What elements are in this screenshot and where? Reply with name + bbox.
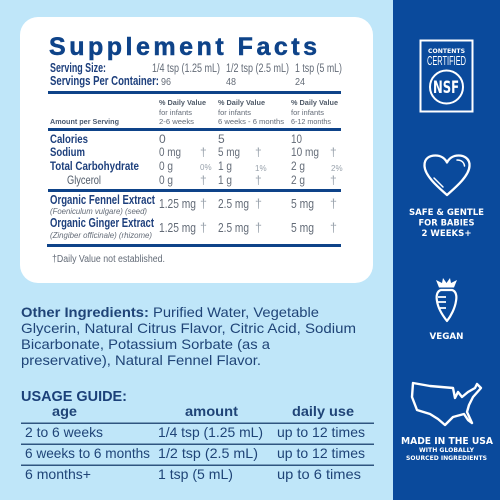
nutrient rows: 1% — [255, 164, 267, 173]
column headers: for infants — [291, 108, 324, 117]
nutrient rows: Calories — [50, 132, 88, 146]
column headers: 6 weeks - 6 months — [218, 117, 284, 126]
usage table headers: daily use — [292, 403, 354, 419]
usage row: 6 weeks to 6 months: up to 12 times — [277, 445, 365, 461]
nutrient rows: † — [330, 145, 337, 159]
icon: NSF certified badge: NSF — [433, 78, 459, 98]
organic extract rows: (Foeniculum vulgare) (seed) — [50, 206, 147, 216]
nutrient rows: 1 g — [218, 159, 232, 173]
nutrient rows: Glycerol — [67, 173, 101, 187]
organic extract rows: Organic Ginger Extract — [50, 216, 155, 230]
nutrient rows: 2 g — [291, 173, 305, 187]
title: Supplement Facts — [49, 33, 317, 61]
benefit label: made in the USA: WITH GLOBALLY — [419, 447, 475, 454]
nutrient rows: 0 — [159, 132, 166, 146]
icon: USA map outline — [412, 383, 481, 425]
column headers: for infants — [218, 108, 251, 117]
usage guide — [21, 389, 374, 482]
organic extract rows: † — [200, 221, 207, 235]
organic extract rows: † — [255, 221, 262, 235]
usage guide heading: USAGE GUIDE: — [21, 389, 127, 405]
usage row: 6 weeks to 6 months: 1/2 tsp (2.5 mL) — [158, 445, 258, 461]
nutrient rows: 10 mg — [291, 145, 319, 159]
nutrient rows: 0 g — [159, 159, 173, 173]
organic extract rows: 5 mg — [291, 220, 314, 235]
column headers: % Daily Value — [218, 98, 265, 107]
nutrient rows: † — [255, 173, 262, 187]
benefit label: made in the USA: SOURCED INGREDIENTS — [406, 455, 487, 462]
nutrient rows: 2% — [331, 164, 343, 173]
usage row: 6 months+: up to 6 times — [277, 466, 361, 482]
usage row: 6 months+: 6 months+ — [25, 466, 91, 482]
serving information: 1/4 tsp (1.25 mL) — [152, 63, 220, 75]
nutrient rows: 0 mg — [159, 145, 181, 159]
icon: NSF certified badge: CONTENTS — [428, 47, 465, 55]
serving information: 48 — [226, 77, 236, 88]
nutrient rows: Total Carbohydrate — [50, 159, 139, 173]
icon: NSF certified badge — [420, 40, 472, 112]
usage row: 2 to 6 weeks: up to 12 times — [277, 424, 365, 440]
usage row: 2 to 6 weeks — [25, 424, 365, 440]
nutrient rows: † — [200, 173, 207, 187]
organic extract rows: Organic Fennel Extract — [50, 193, 156, 207]
organic extract rows: 1.25 mg — [159, 220, 196, 235]
icon: NSF certified badge: CERTIFIED — [427, 53, 466, 68]
benefit label: made in the USA: MADE IN THE USA — [401, 436, 494, 447]
nutrient rows: 5 mg — [218, 145, 240, 159]
organic extract rows: 2.5 mg — [218, 220, 249, 235]
usage row: 6 months+: 1 tsp (5 mL) — [158, 466, 233, 482]
benefit label: vegan: VEGAN — [430, 332, 464, 342]
organic extract rows: † — [255, 197, 262, 211]
icon: carrot — [436, 278, 457, 321]
usage row: 2 to 6 weeks: 2 to 6 weeks — [25, 424, 103, 440]
column headers: Amount per Serving — [50, 117, 119, 126]
nutrient rows: † — [255, 145, 262, 159]
usage row: 6 weeks to 6 months: 6 weeks to 6 months — [25, 445, 150, 461]
other ingredients text: Glycerin, Natural Citrus Flavor, Citric Acid, Sodium — [21, 320, 356, 336]
benefit label: safe and gentle: SAFE & GENTLE — [409, 208, 484, 218]
organic extract rows: 2.5 mg — [218, 196, 249, 211]
benefit label: made in the USA — [401, 436, 494, 462]
other ingredients text: preservative), Natural Fennel Flavor. — [21, 352, 261, 368]
nutrient rows: 0% — [200, 163, 212, 172]
serving information — [50, 61, 342, 88]
serving information: Servings Per Container: — [50, 74, 159, 88]
serving information: 1 tsp (5 mL) — [295, 63, 342, 75]
column headers: % Daily Value — [159, 98, 206, 107]
serving information: 96 — [161, 77, 171, 88]
column headers: for infants — [159, 108, 192, 117]
serving information: Serving Size: — [50, 61, 106, 75]
nutrient rows — [50, 132, 343, 187]
serving information: 1/2 tsp (2.5 mL) — [226, 63, 289, 75]
footnote: †Daily Value not established. — [52, 254, 165, 265]
column headers: 2-6 weeks — [159, 117, 194, 126]
usage row: 2 to 6 weeks: 1/4 tsp (1.25 mL) — [158, 424, 263, 440]
usage table headers: amount — [185, 403, 238, 419]
organic extract rows: † — [330, 221, 337, 235]
other ingredients text: Other Ingredients: Purified Water, Vegetable — [21, 304, 319, 320]
nutrient rows: 0 g — [159, 173, 173, 187]
other ingredients text — [21, 304, 356, 368]
nutrient rows: 5 — [218, 132, 225, 146]
nutrient rows: † — [330, 173, 337, 187]
panel: supplement facts card — [20, 17, 373, 283]
nutrient rows: 10 — [291, 132, 302, 146]
benefit label: safe and gentle — [409, 208, 484, 239]
organic extract rows — [50, 193, 337, 240]
column headers — [50, 98, 338, 126]
nutrient rows: † — [200, 145, 207, 159]
icon: heart — [424, 156, 470, 195]
other ingredients text: Bicarbonate, Potassium Sorbate (as a — [21, 336, 270, 352]
nutrient rows: 1 g — [218, 173, 232, 187]
nutrient rows: 2 g — [291, 159, 305, 173]
organic extract rows: (Zingiber officinale) (rhizome) — [50, 230, 152, 240]
serving information: 24 — [295, 77, 305, 88]
nutrient rows: Sodium — [50, 145, 85, 159]
column headers: % Daily Value — [291, 98, 338, 107]
organic extract rows: † — [330, 197, 337, 211]
panel: benefits sidebar — [393, 0, 500, 500]
organic extract rows: † — [200, 197, 207, 211]
usage table headers: age — [52, 403, 77, 419]
usage row: 6 weeks to 6 months — [25, 445, 365, 461]
organic extract rows: 1.25 mg — [159, 196, 196, 211]
benefit label: safe and gentle: FOR BABIES — [418, 218, 474, 228]
usage table headers — [52, 403, 354, 419]
column headers: 6-12 months — [291, 117, 331, 126]
organic extract rows: 5 mg — [291, 196, 314, 211]
usage row: 6 months+ — [25, 466, 361, 482]
benefit label: safe and gentle: 2 WEEKS+ — [422, 229, 472, 239]
